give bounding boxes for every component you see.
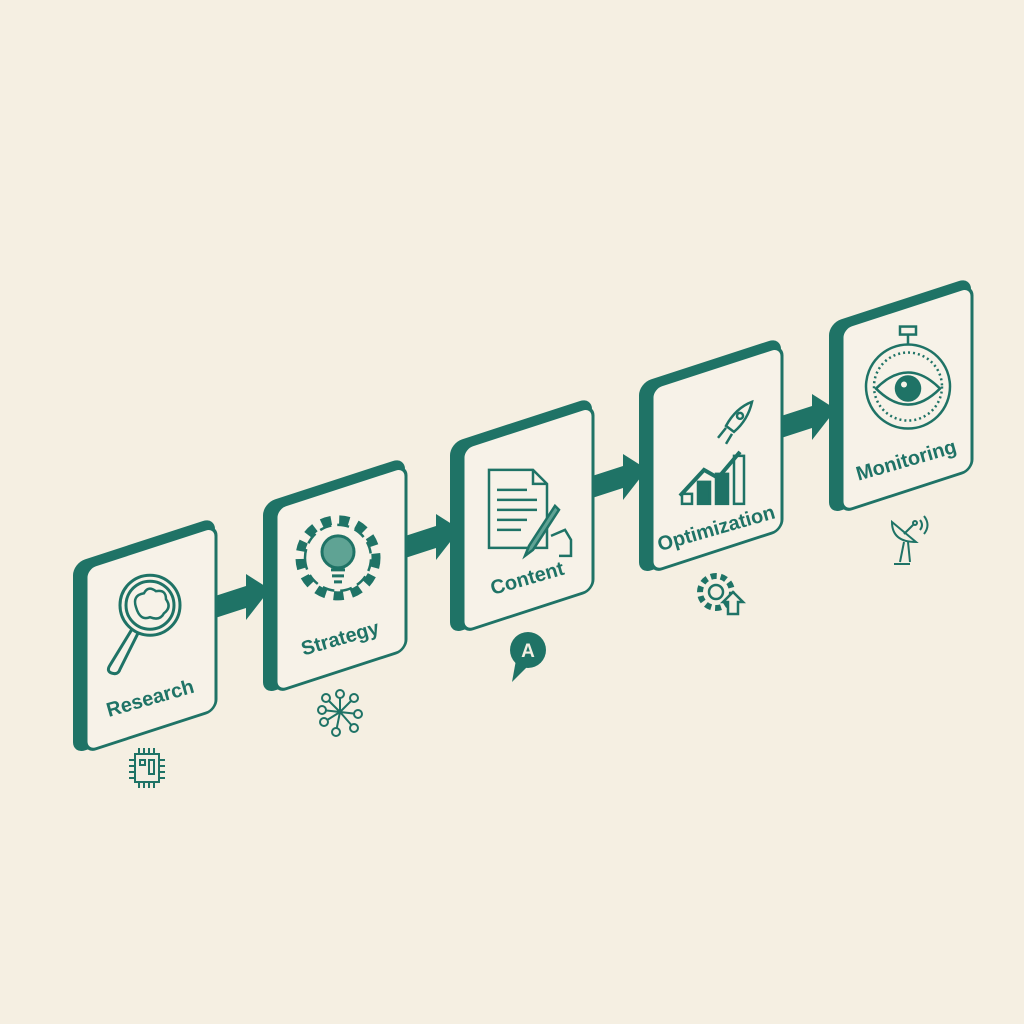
icon: document with pen <box>489 470 571 556</box>
icon: satellite dish <box>892 516 928 564</box>
icon: gear with bulb <box>300 520 376 596</box>
icon: speech bubble A: A <box>521 641 535 662</box>
label: Optimization: Optimization <box>655 502 778 556</box>
card: Content <box>450 379 647 636</box>
label: Strategy: Strategy <box>299 617 383 660</box>
card: Research <box>73 499 270 756</box>
icon: rocket and chart <box>680 402 752 504</box>
icon: gear with arrow <box>700 576 743 614</box>
card: Monitoring <box>829 277 972 516</box>
icon: speech bubble A <box>510 632 546 682</box>
label: Content: Content <box>488 558 567 600</box>
label: Monitoring: Monitoring <box>854 436 959 486</box>
icon: chip <box>129 748 165 788</box>
card: Optimization <box>639 319 836 576</box>
icon: magnifier with brain <box>108 575 180 674</box>
label: Research: Research <box>104 676 197 722</box>
icon: network <box>318 690 362 736</box>
icon: eye in compass <box>866 327 950 429</box>
card: Strategy <box>263 439 460 696</box>
